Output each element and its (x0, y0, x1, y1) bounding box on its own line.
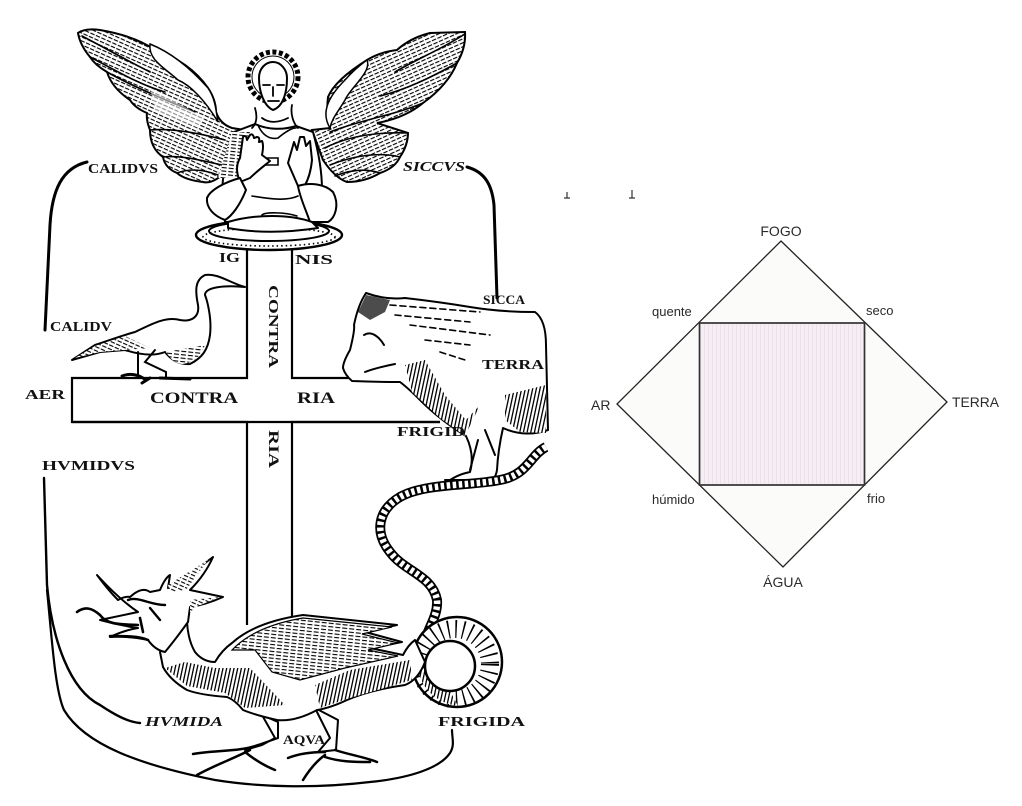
head fur (358, 295, 390, 320)
label TERRA: TERRA (482, 358, 545, 373)
label AGUA: ÁGUA (763, 574, 803, 590)
legs and feet (193, 708, 377, 780)
fur shading (405, 360, 480, 436)
label HVMIDA: HVMIDA (144, 715, 223, 730)
right sleeve (298, 184, 336, 222)
heron (72, 275, 245, 383)
tail loop (412, 617, 502, 707)
face and legs (364, 333, 495, 480)
head markings (128, 599, 165, 620)
raised left hand (237, 134, 270, 182)
label CONTRA: CONTRA (150, 390, 239, 407)
panel: medieval woodcut of the elements (25, 29, 548, 786)
label RIA: RIA (297, 390, 336, 407)
right wing (312, 32, 465, 182)
stray top marks of cropped text (564, 190, 635, 198)
wing hatch (75, 336, 150, 358)
label HVMIDVS: HVMIDVS (42, 459, 135, 474)
label TERRA: TERRA (952, 394, 1000, 410)
body and arms (222, 124, 322, 222)
element diamond (617, 241, 947, 567)
label FRIGID: FRIGID (397, 425, 465, 440)
dragon head (97, 557, 223, 652)
frame lines joining the qualities (44, 162, 497, 786)
dragon of water (77, 557, 502, 780)
latin labels (25, 160, 545, 747)
wing (232, 618, 398, 680)
dotted plate (196, 216, 342, 250)
claws (122, 374, 190, 383)
label NIS: NIS (295, 253, 333, 268)
legs and feet (138, 350, 166, 378)
label seco: seco (866, 303, 893, 318)
neck (252, 105, 298, 128)
label AQVA: AQVA (283, 732, 326, 747)
bear of earth (343, 293, 548, 484)
rear stripes (315, 660, 412, 708)
mouth and tongue (77, 608, 148, 640)
label IG: IG (219, 251, 240, 266)
label FOGO: FOGO (760, 223, 802, 239)
qualities square (700, 323, 864, 485)
label AR: AR (591, 397, 610, 413)
left wing (78, 29, 245, 182)
hatching on the sleeve (218, 132, 250, 178)
label humido: húmido (652, 492, 695, 507)
label CALIDV: CALIDV (50, 320, 112, 335)
belly hatch (166, 345, 205, 364)
belly stripes (165, 662, 285, 708)
label AER: AER (25, 388, 66, 403)
label quente: quente (652, 304, 692, 319)
head with curls (248, 52, 298, 110)
snake tail (380, 447, 546, 632)
vertical label CONTRA: CONTRA (265, 285, 280, 369)
collar and robe folds (252, 125, 298, 216)
panel: square of opposition diagram (591, 223, 1000, 590)
label frio: frio (867, 491, 885, 506)
left sleeve (207, 178, 246, 220)
body and neck (160, 615, 425, 720)
haunch shading (505, 385, 546, 433)
label FRIGIDA: FRIGIDA (438, 715, 526, 730)
cross of contraries (72, 245, 440, 625)
crest (168, 560, 220, 612)
angel of fire (78, 29, 465, 250)
raised right hand (288, 137, 312, 186)
label SICCVS: SICCVS (403, 160, 465, 175)
back fur (390, 305, 490, 360)
vertical label RIA: RIA (265, 430, 281, 468)
label SICCA: SICCA (483, 292, 526, 307)
label CALIDVS: CALIDVS (88, 162, 158, 177)
